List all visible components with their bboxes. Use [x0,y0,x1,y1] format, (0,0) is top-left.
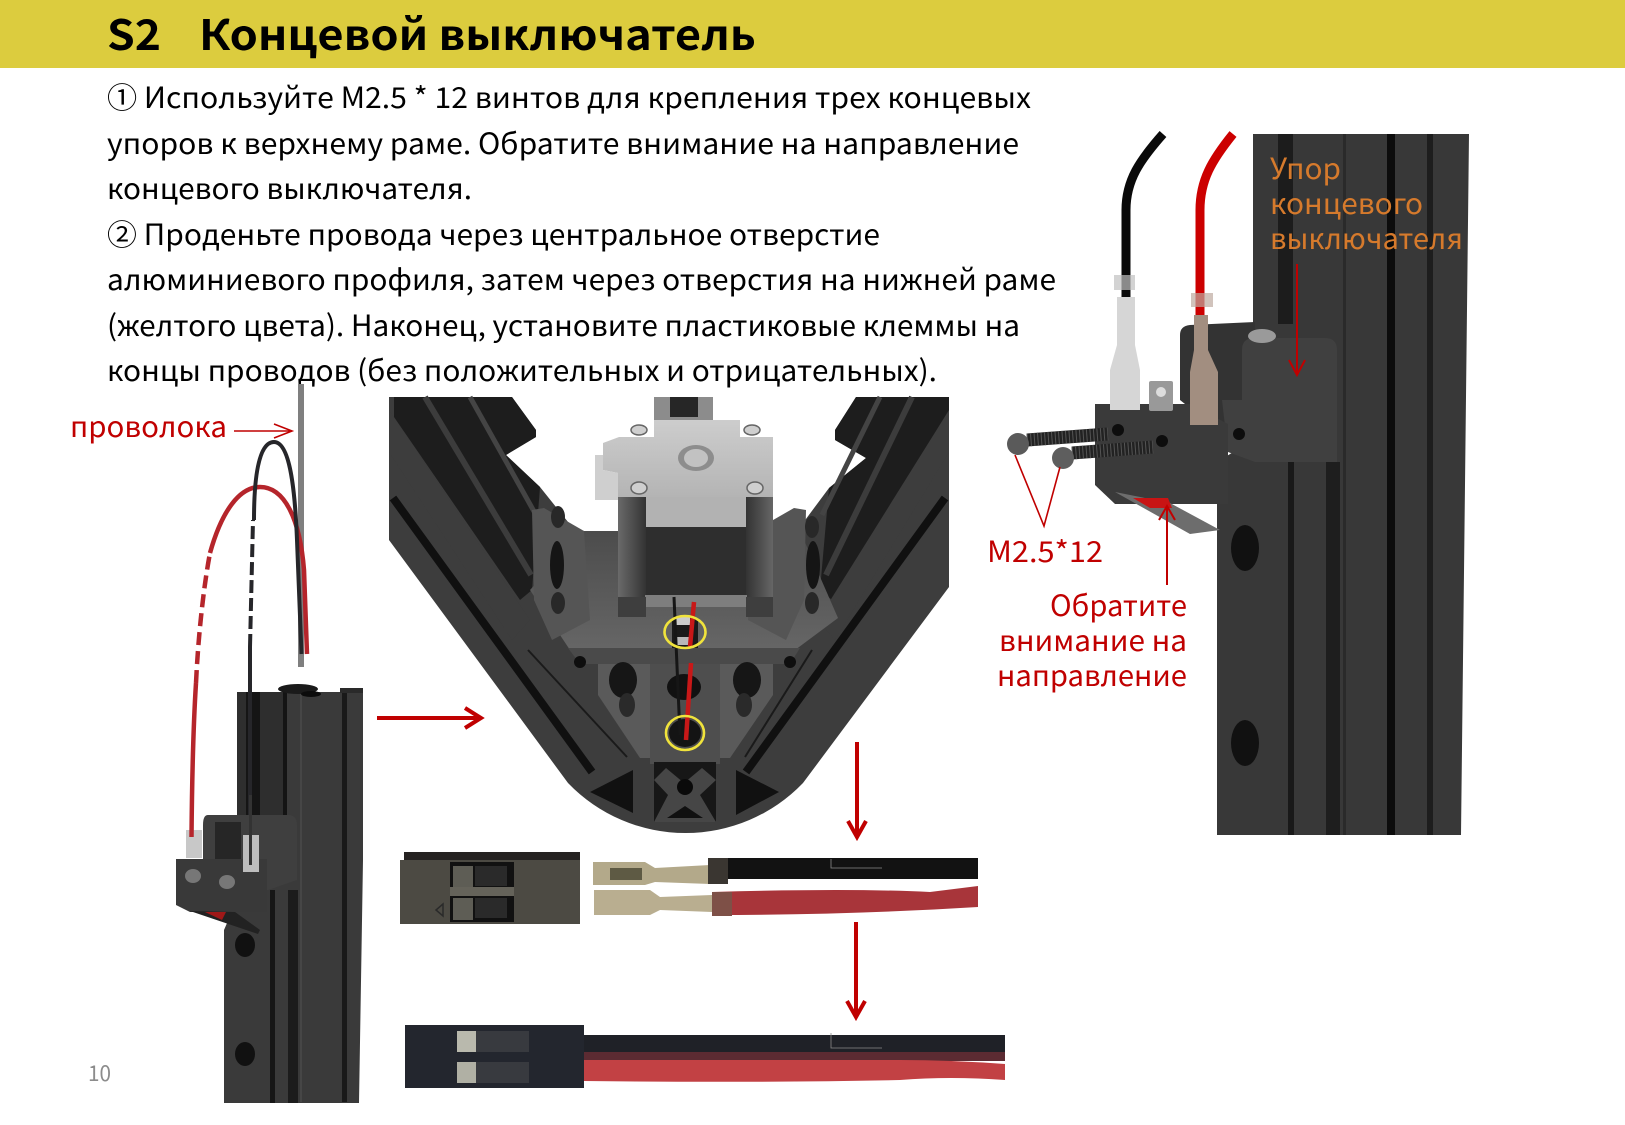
switch bracket [203,815,297,890]
gray guide rod [298,384,304,667]
instruction text block: концы проводов (без положительных и отрицательных). [107,348,937,390]
side bracket left [532,508,590,640]
instruction text block [107,75,1056,390]
callout lines to screws [1015,455,1060,526]
extrusion bottom cutouts [590,762,779,822]
red wire [192,487,307,837]
page number: 10 [88,1056,111,1088]
label: wire: проволока [70,404,227,446]
black wire [1126,134,1163,297]
label: screw size: M2.5*12 [987,529,1103,571]
motor connector top [654,397,713,421]
arrow: orange label to bracket [1289,264,1305,375]
arrow: wire label to rod [234,424,292,438]
corner frame [389,397,949,833]
instruction text block: ② Проденьте провода через центральное отверстие [107,212,880,254]
switch lever [190,911,260,934]
bracket slots [550,506,820,614]
label: pay attention to direction [997,583,1187,695]
hole detail in base plate [672,618,698,648]
title: Концевой выключатель [199,2,756,63]
micro switch [1095,404,1228,504]
yellow highlight circles [664,616,706,750]
bracket back [1180,322,1255,440]
center illustration: frame corner with motor [389,397,949,833]
dark rail band right [820,397,949,600]
label: endstop stop (orange): Упор [1270,146,1341,188]
arrow: left illustration to frame [377,708,481,728]
red wire [1200,134,1233,315]
motor side tab [595,455,618,500]
label: pay attention to direction: Обратите [1050,583,1187,625]
right illustration: switch on upright profile [1007,134,1469,835]
arrow: direction note to lever [1159,506,1175,585]
title: S2 [107,2,161,63]
base plate [530,531,838,650]
motor shaft hole [678,445,714,471]
label: endstop stop (orange): выключателя [1270,216,1463,258]
label: pay attention to direction: внимание на [999,618,1187,660]
micro switch body [176,859,267,912]
instruction text block: (желтого цвета). Наконец, установите пластиковые клеммы на [107,303,1020,345]
label: endstop stop (orange) [1270,146,1463,258]
switch holes [1112,424,1245,447]
connector housing photo [400,852,580,924]
dark rail band left [394,397,540,600]
switch mounting holes [185,869,235,889]
instruction text block: упоров к верхнему раме. Обратите внимание на направление [107,121,1019,163]
lever [1115,492,1220,534]
bracket screw head [1248,329,1276,343]
black wire [250,442,302,860]
screws [1007,433,1153,469]
crimped terminals and loose wires photo [593,858,978,916]
motor body [618,497,773,617]
wire terminals [186,830,259,872]
instruction text block: ① Используйте М2.5 * 12 винтов для крепления трех концевых [107,75,1031,117]
front terminal over bracket [243,795,259,872]
bracket block [1222,338,1337,462]
side bracket right [748,508,806,640]
motor screws [631,425,763,494]
rail highlight faces [389,410,949,640]
label: pay attention to direction: направление [997,653,1187,695]
left illustration: profile with limit switch and wires [176,384,363,1103]
arrow: frame to connector parts [848,742,866,837]
cross band with holes [568,648,800,668]
wires through frame [674,597,694,783]
switch tabs [1115,370,1173,411]
instruction text block: концевого выключателя. [107,166,472,208]
rail grooves [393,397,945,772]
motor top plate [603,420,773,497]
assembled connector photo [405,1025,1005,1088]
label: endstop stop (orange): концевого [1270,181,1423,223]
left terminal [1110,275,1140,410]
instruction text block: алюминиевого профиля, затем через отверстия на нижней раме [107,257,1056,299]
upright profile [1217,134,1469,835]
arrow: parts to assembled connector [847,922,865,1017]
header bar [0,0,1625,68]
aluminium profile [224,684,363,1103]
right terminal [1190,293,1218,425]
lower chamber [598,662,773,764]
